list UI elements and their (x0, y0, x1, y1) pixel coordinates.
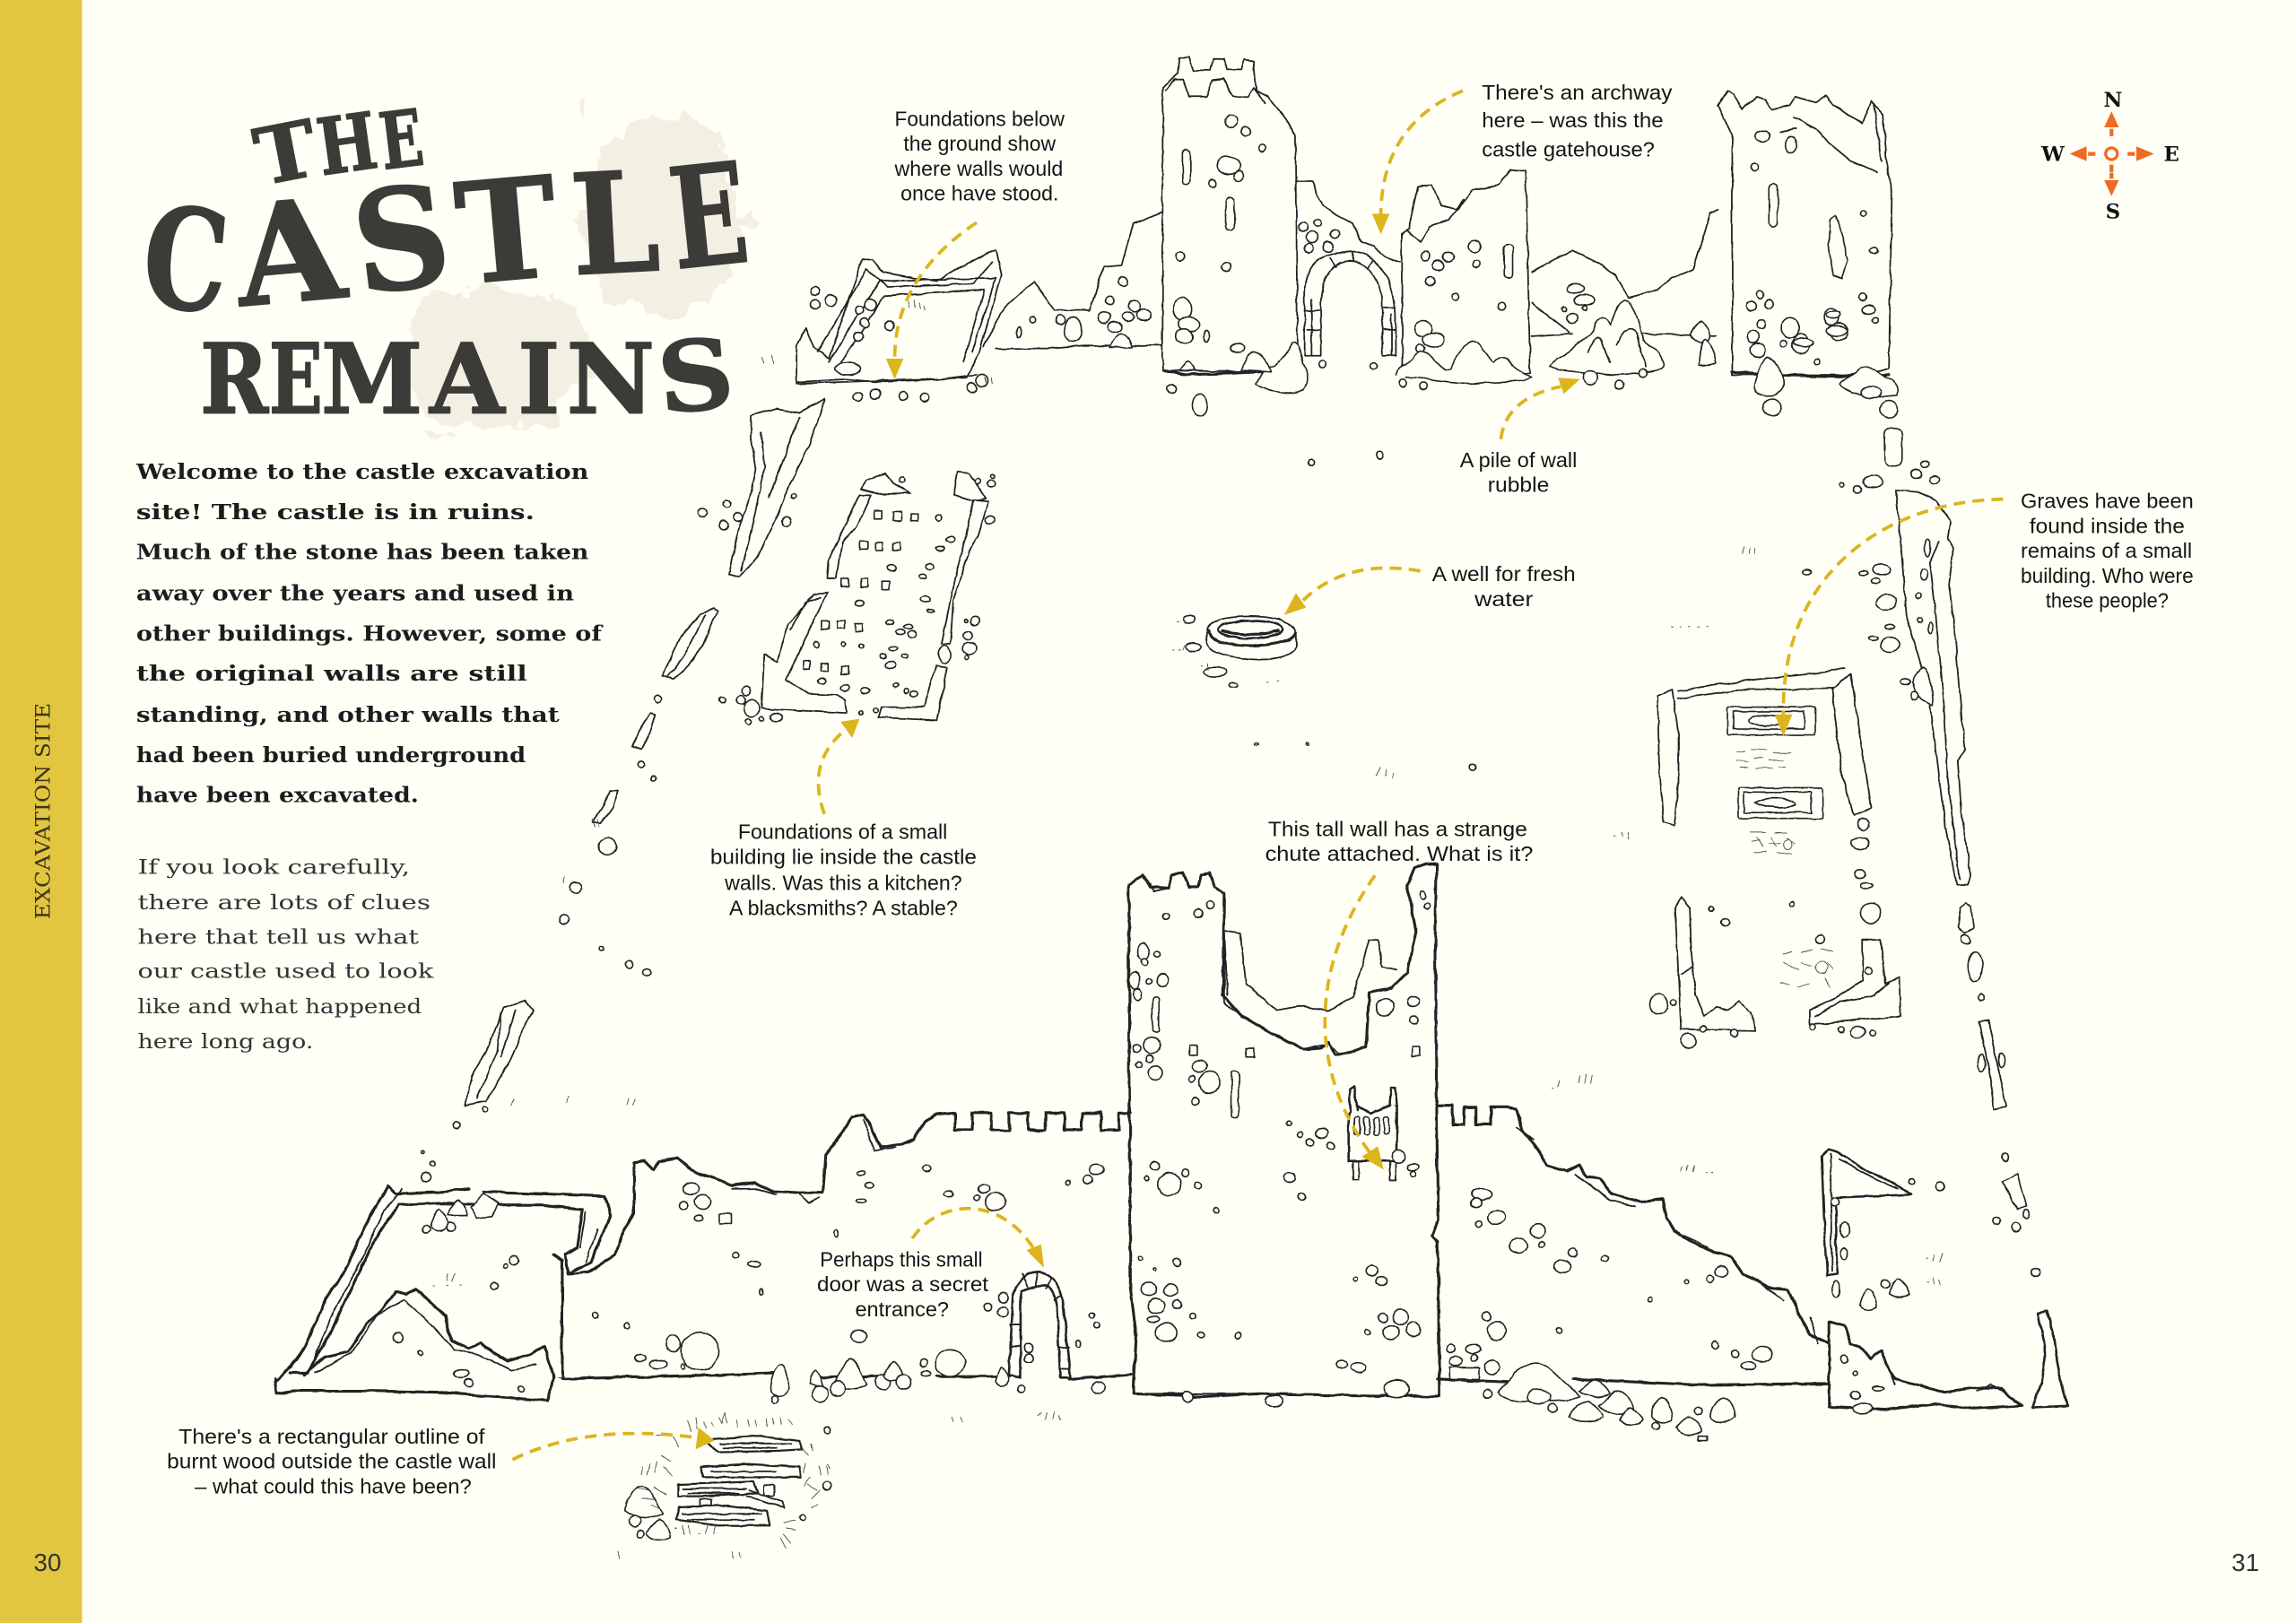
north gatehouse archway (1296, 181, 1400, 369)
annotation: foundations below the ground: Foundations below (895, 107, 1065, 130)
arrow: graves (1775, 499, 2003, 736)
annotation: well: water (1474, 587, 1534, 611)
secondary paragraph: there are lots of clues (137, 892, 430, 915)
castle ruins line drawing (275, 57, 2067, 1559)
title word: CASTLE: S (344, 152, 458, 326)
compass letters: E (2164, 143, 2179, 167)
south-east corner (1552, 833, 2067, 1413)
annotation: archway (1482, 81, 1673, 161)
title (137, 91, 755, 437)
intro paragraph: other buildings. However, some of (136, 621, 604, 646)
annotation: archway: castle gatehouse? (1482, 138, 1655, 161)
tall tower with chute (1129, 864, 1439, 1407)
annotation: graves: found inside the (2030, 514, 2185, 537)
secondary paragraph: here long ago. (137, 1031, 313, 1054)
intro paragraph: site! The castle is in ruins. (136, 499, 535, 525)
small building foundations (719, 472, 995, 725)
well (1173, 452, 1756, 777)
annotation: small building: A blacksmiths? A stable? (729, 896, 958, 919)
north tower, right (1718, 91, 1899, 416)
compass letters: N (2103, 89, 2122, 112)
annotation: foundations below the ground: once have stood. (900, 182, 1058, 205)
intro paragraph: have been excavated. (136, 783, 419, 808)
small secret door (985, 1272, 1100, 1377)
annotation: archway: There's an archway (1482, 81, 1673, 104)
annotation: graves (2021, 490, 2194, 612)
annotation: foundations below the ground (894, 107, 1065, 205)
annotation: secret door (817, 1247, 989, 1321)
annotation: chute (1265, 817, 1533, 865)
burnt wood outline (618, 1413, 1060, 1559)
annotation: graves: remains of a small (2021, 539, 2192, 562)
secondary paragraph: here that tell us what (137, 926, 419, 949)
north wall rubble pile (1532, 209, 1718, 389)
wall rubble at base (770, 1350, 1105, 1403)
title word: REMAINS: A (429, 323, 506, 436)
west wall fragments (421, 357, 824, 1182)
north tower, left (1162, 57, 1307, 415)
annotation: rubble: A pile of wall (1460, 448, 1577, 472)
title word: CASTLE: L (567, 139, 663, 308)
title word: REMAINS: S (653, 317, 738, 437)
annotation: well: A well for fresh (1432, 562, 1576, 586)
annotation: graves: Graves have been (2021, 490, 2194, 513)
annotation: chute: chute attached. What is it? (1265, 842, 1533, 865)
title word: THE: H (312, 95, 383, 194)
intro paragraph: away over the years and used in (136, 580, 574, 605)
page number 31: 31 (2231, 1549, 2259, 1576)
secondary paragraph: If you look carefully, (137, 857, 410, 880)
title word: REMAINS: M (321, 322, 422, 436)
page number 30: 30 (34, 1549, 61, 1576)
annotation: graves: building. Who were (2021, 564, 2194, 587)
intro paragraph: Much of the stone has been taken (136, 540, 588, 565)
compass arrows (2070, 111, 2154, 196)
compass centre ring (2106, 148, 2118, 160)
title word: CASTLE: T (449, 146, 564, 317)
arrow: well (1284, 568, 1421, 615)
south wall, left section (553, 1113, 1132, 1403)
annotation: secret door: entrance? (855, 1298, 949, 1321)
annotation: secret door: Perhaps this small (820, 1247, 983, 1271)
south-west corner (275, 1185, 611, 1402)
annotation: foundations below the ground: the ground show (903, 132, 1057, 155)
annotation: rubble (1460, 448, 1577, 497)
title word: CASTLE (137, 131, 755, 345)
section label: EXCAVATION SITE (32, 703, 56, 919)
secondary paragraph (137, 857, 434, 1054)
compass letters: S (2106, 200, 2120, 223)
annotation: small building: building lie inside the castle (710, 845, 977, 868)
title word: REMAINS (200, 317, 738, 437)
arrow: burnt wood (512, 1428, 715, 1460)
title word: REMAINS: N (567, 323, 655, 436)
annotation: archway: here – was this the (1482, 108, 1664, 132)
title word: CASTLE: A (227, 166, 353, 339)
title word: CASTLE: C (137, 177, 235, 345)
secondary paragraph: our castle used to look (137, 961, 434, 984)
chute (1349, 1086, 1419, 1180)
south inner walls of graves building (1650, 898, 1900, 1048)
intro paragraph: Welcome to the castle excavation (135, 459, 588, 484)
arrow: archway (1372, 91, 1463, 234)
annotation: burnt wood (167, 1425, 496, 1497)
annotation: small building (710, 820, 977, 919)
east wall stones and long wall (1803, 401, 2006, 1110)
annotation: well (1432, 562, 1576, 611)
arrow: small building (818, 719, 859, 814)
intro paragraph (135, 459, 604, 808)
annotation: small building: walls. Was this a kitchen? (724, 872, 962, 895)
annotation: foundations below the ground: where walls would (894, 157, 1063, 180)
title word: REMAINS: R (200, 322, 269, 436)
annotation: burnt wood: There's a rectangular outline of (178, 1425, 485, 1448)
title word: REMAINS: E (269, 323, 323, 437)
title word: THE: E (375, 91, 428, 187)
arrow: chute (1325, 875, 1384, 1170)
south wall, right slope (1438, 1106, 1829, 1441)
annotation: small building: Foundations of a small (738, 820, 947, 844)
intro paragraph: standing, and other walls that (136, 702, 560, 727)
annotation: burnt wood: burnt wood outside the castle wall (167, 1450, 496, 1473)
arrow: foundations (886, 222, 977, 379)
compass (2040, 89, 2179, 223)
arrow: rubble (1500, 378, 1580, 439)
annotation: chute: This tall wall has a strange (1268, 817, 1527, 840)
compass letters: W (2040, 143, 2065, 167)
annotation: graves: these people? (2046, 589, 2169, 612)
annotation: burnt wood: – what could this have been? (195, 1474, 472, 1497)
title word: REMAINS: I (517, 322, 560, 436)
annotation: rubble: rubble (1488, 473, 1549, 497)
compass letters (2040, 89, 2179, 223)
intro paragraph: the original walls are still (136, 661, 527, 686)
title word: THE: T (248, 102, 324, 204)
arrow: secret door (912, 1209, 1044, 1268)
north gatehouse tower (1396, 169, 1532, 390)
north wall: ruined curtain wall (984, 213, 1164, 349)
title word: CASTLE: E (662, 131, 755, 301)
annotation: secret door: door was a secret (817, 1272, 989, 1296)
title word: THE (248, 91, 428, 204)
paint splatter behind title (401, 100, 757, 440)
yellow side band (0, 0, 82, 1623)
intro paragraph: had been buried underground (136, 742, 526, 768)
graves building (1657, 668, 1872, 854)
secondary paragraph: like and what happened (137, 996, 422, 1019)
rubble pile at right tower base (1483, 1363, 1735, 1441)
north wall: foundation rectangle (771, 250, 1002, 402)
